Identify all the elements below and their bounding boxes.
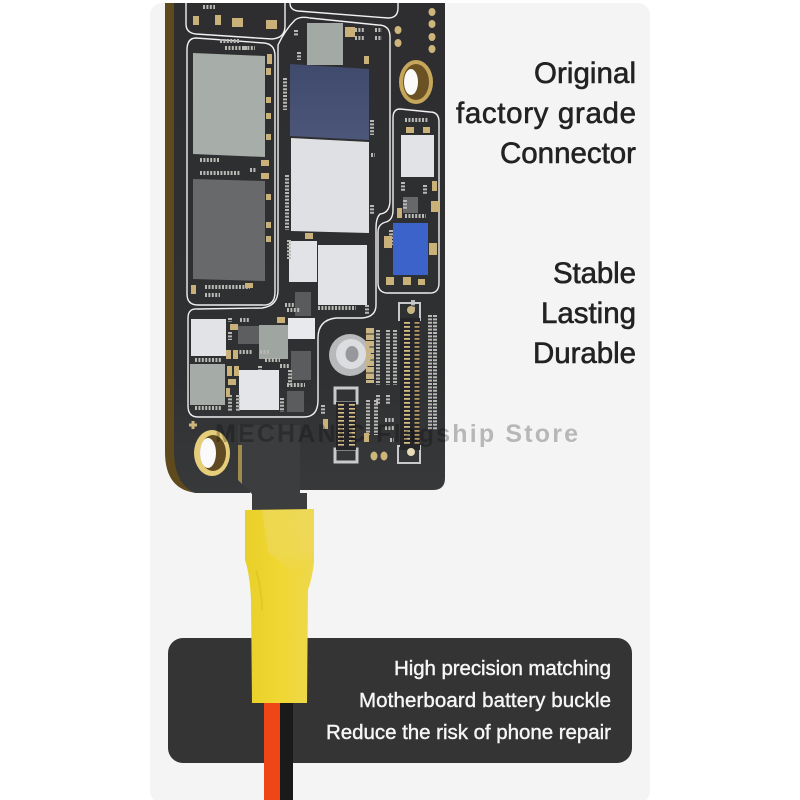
small pads [195, 7, 435, 440]
sleeve highlight [262, 510, 314, 578]
callout text: Motherboard battery buckle [359, 689, 611, 712]
yellow connector sleeve [245, 509, 314, 703]
icon: top mounting hole [399, 60, 433, 104]
gold via dots [370, 8, 436, 460]
heading: factory grade: factory grade [456, 97, 636, 130]
board body [174, 3, 445, 493]
chip: big white [291, 138, 369, 233]
chip: navy [290, 64, 369, 140]
chip: right white [318, 245, 367, 305]
chip: blue [393, 223, 428, 275]
callout text: Reduce the risk of phone repair [326, 721, 611, 744]
flex tab [238, 425, 307, 512]
icon: silver screw [329, 334, 371, 376]
chip: large grey [193, 53, 265, 157]
chip: grey top [307, 23, 343, 65]
chip: right column white [401, 135, 434, 177]
icon: lower mounting hole [194, 430, 230, 476]
white circuit outlines [186, 3, 439, 417]
heading: stable: Lasting [541, 297, 636, 330]
large connector [398, 303, 420, 463]
callout text: High precision matching [394, 657, 611, 680]
small connector [335, 388, 357, 462]
gold components [191, 15, 439, 442]
heading: factory grade: Connector [500, 137, 636, 170]
heading: stable: Stable [553, 257, 636, 290]
watermark: MECHANIC Flagship Store [215, 420, 578, 448]
dark callout card [168, 638, 632, 763]
wires [264, 700, 293, 800]
heading: stable: Durable [533, 337, 636, 370]
heading: stable [533, 257, 636, 370]
black wire [280, 700, 293, 800]
gold pad strip [366, 328, 374, 383]
sleeve crease [256, 570, 262, 610]
red wire [264, 700, 280, 800]
heading: factory grade [456, 57, 636, 170]
heading: factory grade: Original [534, 57, 636, 90]
board gold edge [165, 3, 200, 493]
callout text [326, 657, 611, 744]
background panel [150, 3, 650, 800]
chip: small dark [403, 197, 418, 213]
gold cross mark [189, 421, 197, 429]
chip: large dark [193, 179, 265, 281]
chip: dark mid [295, 292, 311, 316]
lower chips [190, 318, 315, 412]
chip: small white [289, 241, 317, 282]
motherboard [165, 3, 445, 512]
